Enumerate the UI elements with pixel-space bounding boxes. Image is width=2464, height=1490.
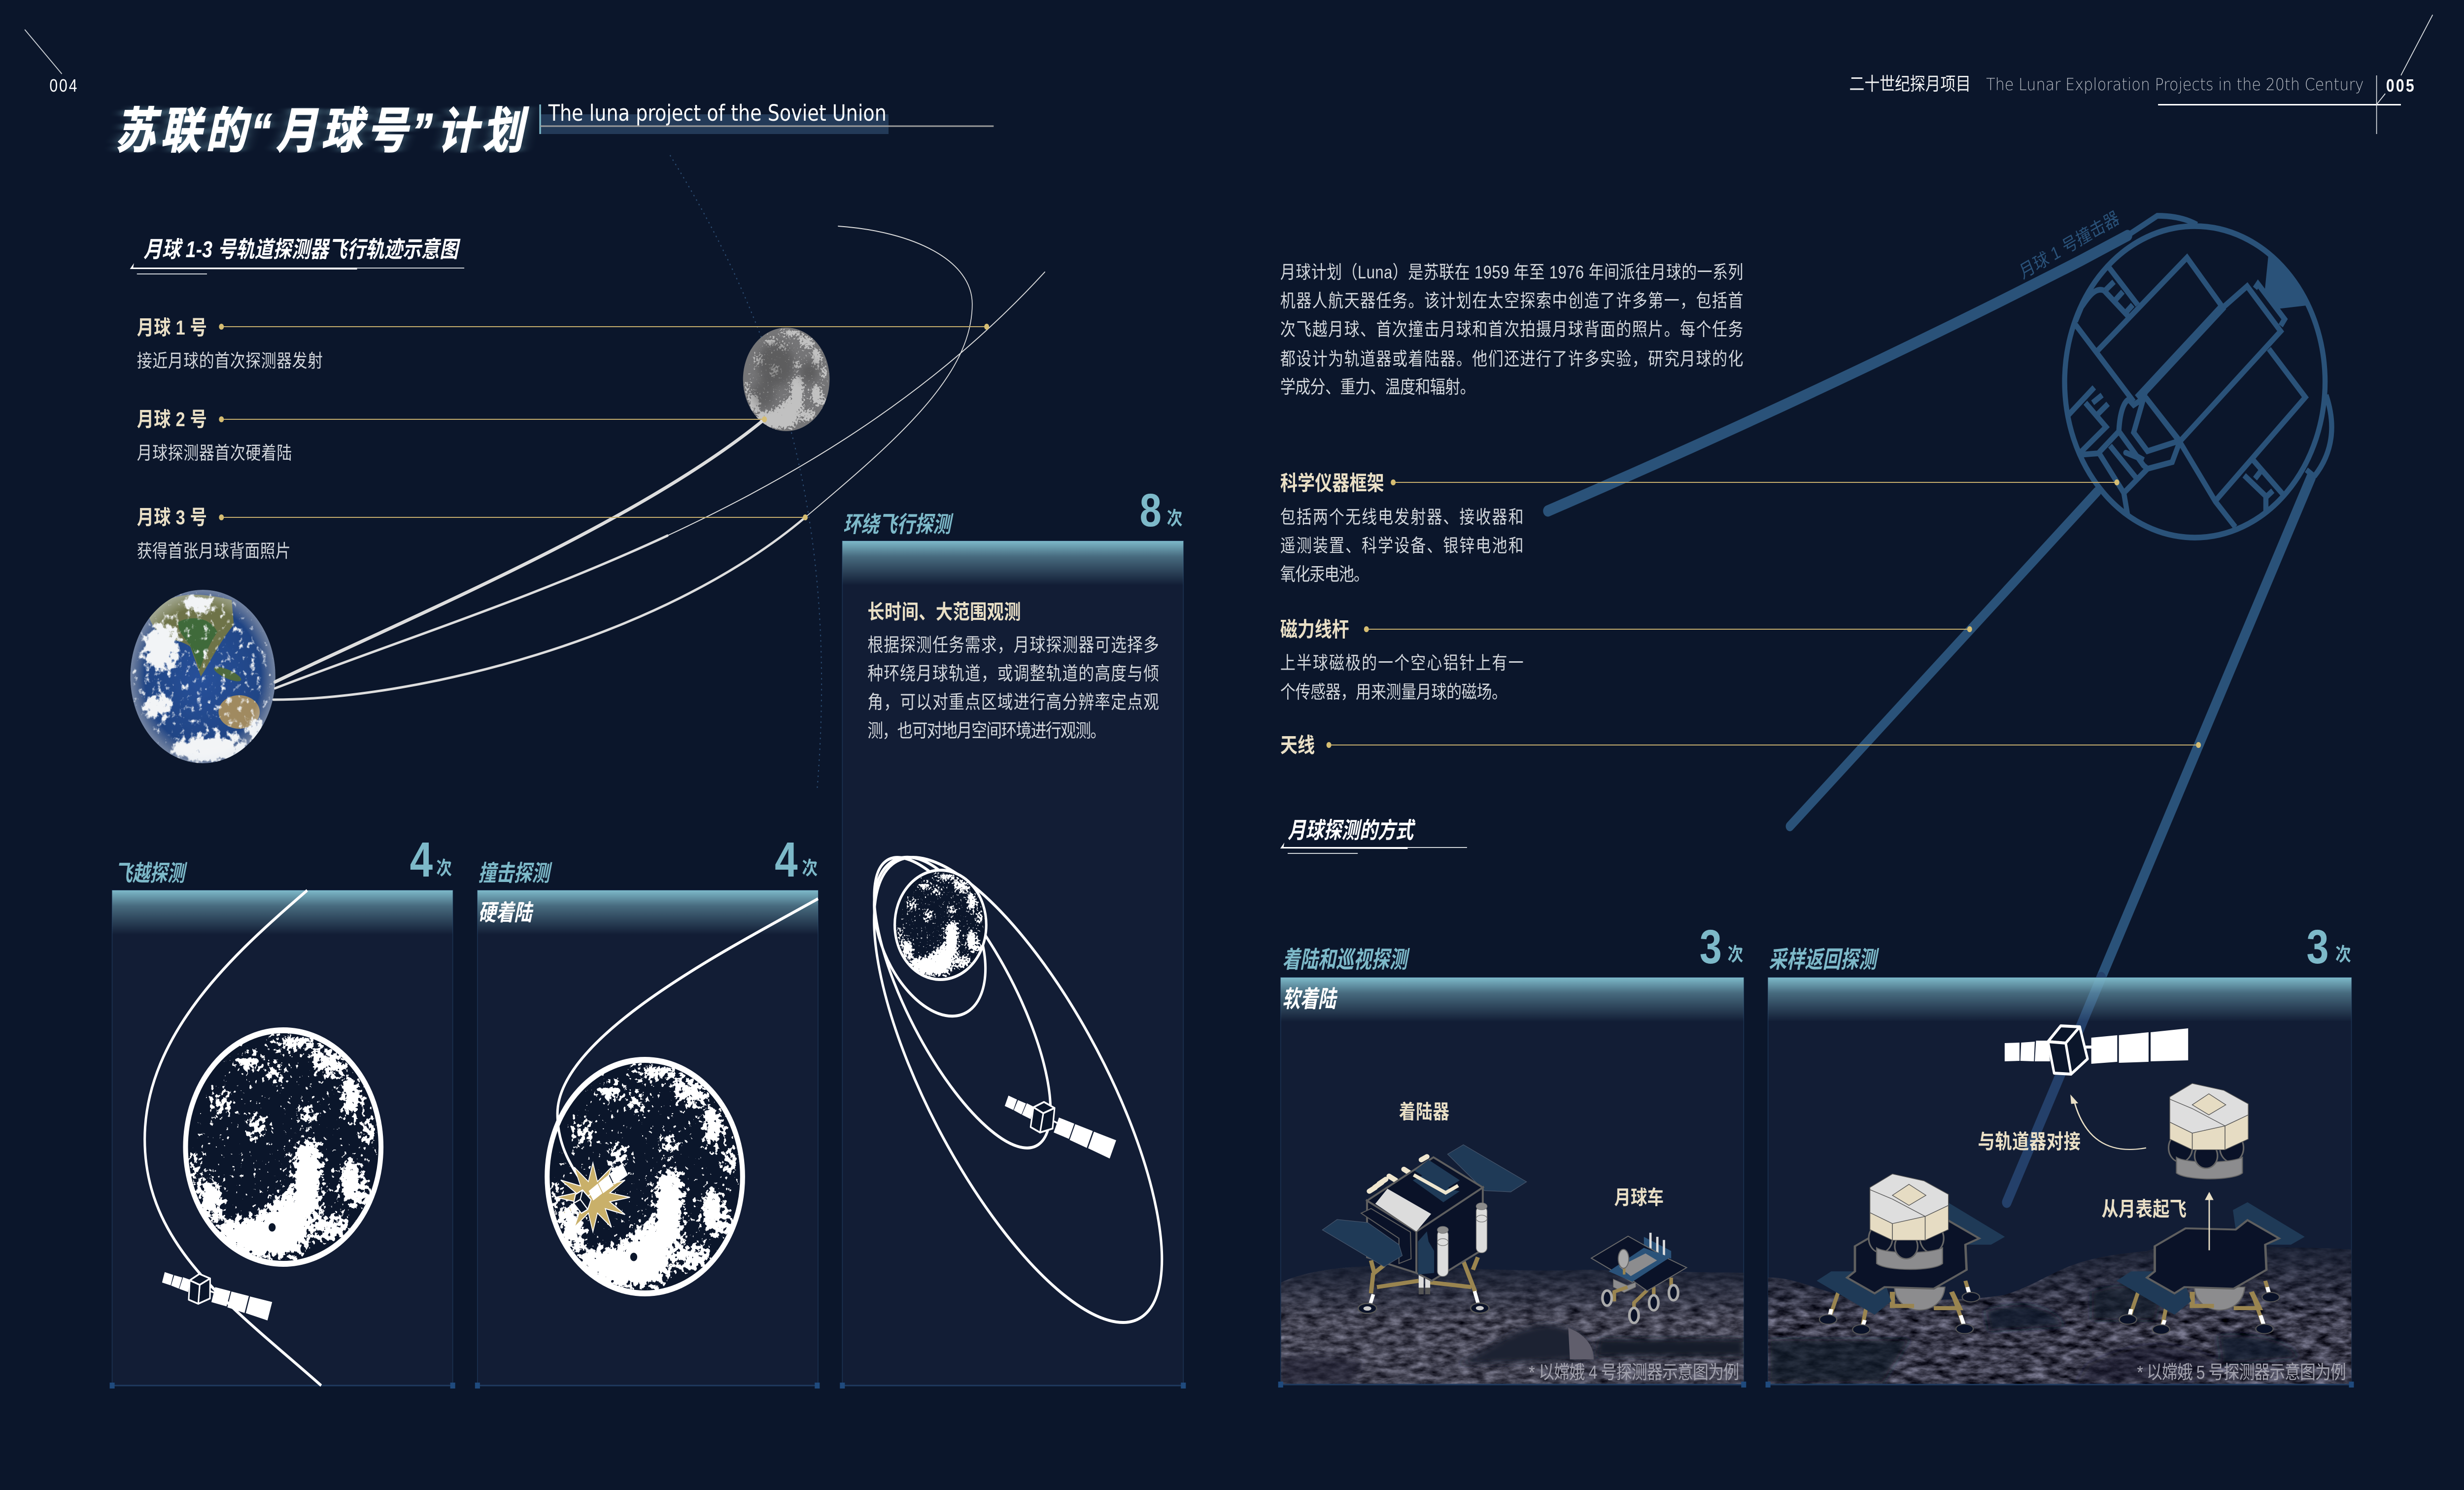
panel: landing and rover: 次 <box>1728 944 1743 965</box>
arrows: docking and liftoff <box>2070 1094 2214 1251</box>
running header right <box>1849 15 2432 134</box>
callout: antenna: 天线 <box>1280 734 1315 757</box>
panel: flyby <box>110 832 455 1388</box>
title: 苏联的“月球号”计划 <box>115 104 529 159</box>
panel: landing and rover: 着陆器 <box>1399 1101 1449 1123</box>
panel: landing and rover: * 以嫦娥 4 号探测器示意图为例 <box>1529 1362 1739 1383</box>
section heading: exploration methods <box>1280 818 1467 853</box>
moon photo <box>742 327 830 432</box>
panel: orbiting <box>840 494 1186 1388</box>
panel: flyby: 次 <box>436 858 452 879</box>
panel: impact <box>475 832 820 1388</box>
panel: impact: 4 <box>775 832 798 887</box>
title: 苏联的“月球号”计划 <box>115 104 529 159</box>
panel: orbiting: 角，可以对重点区域进行高分辨率定点观 <box>867 692 1159 713</box>
callout: magnetometer boom: 上半球磁极的一个空心铝针上有一 <box>1280 653 1524 674</box>
callout: luna 1: 月球 1 号 <box>137 317 207 339</box>
callout: instrument frame: 遥测装置、科学设备、银锌电池和 <box>1280 536 1524 556</box>
panel: sample return: 次 <box>2335 944 2351 965</box>
illustration: orbiter <box>2005 1026 2188 1074</box>
panel: orbiting: 次 <box>1167 508 1183 529</box>
illustration: rover <box>1591 1233 1687 1323</box>
panel: orbiting: 长时间、大范围观测 <box>867 601 1021 624</box>
callout: luna 3 <box>137 507 808 562</box>
panel: landing and rover: 3 <box>1700 920 1722 974</box>
faint dotted lunar orbit <box>670 155 821 788</box>
illustration: luna 1 sputnik-style probe <box>1548 216 2332 978</box>
panel: flyby: 飞越探测 <box>115 861 187 886</box>
earth <box>130 589 276 764</box>
panel: orbiting: 种环绕月球轨道，或调整轨道的高度与倾 <box>867 663 1159 684</box>
callout: luna 1 <box>137 317 989 372</box>
callout: magnetometer boom: 个传感器，用来测量月球的磁场。 <box>1280 682 1507 703</box>
callout: luna 2 <box>137 408 767 464</box>
intro text: 都设计为轨道器或着陆器。他们还进行了许多实验，研究月球的化 <box>1280 349 1743 370</box>
callout: magnetometer boom: 磁力线杆 <box>1280 618 1349 642</box>
callout: luna 2: 月球探测器首次硬着陆 <box>137 443 292 464</box>
callout: instrument frame <box>1280 472 2120 585</box>
callout: luna 3: 获得首张月球背面照片 <box>137 541 291 562</box>
subtitle English <box>539 100 993 134</box>
intro text: 机器人航天器任务。该计划在太空探索中创造了许多第一，包括首 <box>1280 291 1743 311</box>
callout: antenna <box>1280 734 2201 757</box>
panel: sample return: 3 <box>2306 920 2329 974</box>
section heading: exploration methods: 月球探测的方式 <box>1288 818 1416 843</box>
intro text: 月球计划（Luna）是苏联在 1959 年至 1976 年间派往月球的一系列 <box>1280 262 1743 283</box>
panel: impact: 撞击探测 <box>479 861 552 886</box>
panel: orbiting: 8 <box>1140 484 1162 537</box>
panel: sample return <box>1766 920 2354 1388</box>
panel: sample return: 与轨道器对接 <box>1978 1131 2081 1153</box>
intro text: 次飞越月球、首次撞击月球和首次拍摄月球背面的照片。每个任务 <box>1280 319 1743 340</box>
panel: landing and rover: 着陆和巡视探测 <box>1282 947 1410 973</box>
section heading: trajectories: 月球 1-3 号轨道探测器飞行轨迹示意图 <box>143 237 461 262</box>
panel: landing and rover: 月球车 <box>1614 1186 1664 1209</box>
intro text <box>1280 262 1743 398</box>
callout: instrument frame: 科学仪器框架 <box>1280 472 1384 495</box>
page number left with corner tick: 004 <box>49 76 77 96</box>
running header right: 二十世纪探月项目 <box>1849 74 1971 95</box>
panel: orbiting: 根据探测任务需求，月球探测器可选择多 <box>867 635 1159 656</box>
panel: landing and rover <box>1278 920 1746 1388</box>
page number left with corner tick <box>25 30 77 96</box>
running header right: The Lunar Exploration Projects in the 20th Century <box>1986 75 2364 95</box>
panel: sample return: 从月表起飞 <box>2102 1198 2187 1221</box>
panel: impact: 硬着陆 <box>479 900 534 925</box>
panel: orbiting: 环绕飞行探测 <box>843 512 954 537</box>
panel: flyby: 4 <box>410 832 433 887</box>
callout: magnetometer boom <box>1280 618 1972 703</box>
subtitle English: The luna project of the Soviet Union <box>548 100 887 126</box>
panel: sample return: * 以嫦娥 5 号探测器示意图为例 <box>2137 1362 2346 1383</box>
panel: landing and rover: 软着陆 <box>1282 986 1338 1013</box>
callout: luna 3: 月球 3 号 <box>137 507 207 529</box>
intro text: 学成分、重力、温度和辐射。 <box>1280 377 1475 398</box>
trajectories: luna 1, 2, 3 <box>274 226 1045 700</box>
label: luna 1 impactor: 月球 1 号撞击器 <box>2017 208 2122 283</box>
callout: luna 1: 接近月球的首次探测器发射 <box>137 351 323 372</box>
illustration: landers with ascent vehicles <box>1816 1084 2305 1334</box>
running header right: 005 <box>2386 76 2414 96</box>
callout: instrument frame: 包括两个无线电发射器、接收器和 <box>1280 507 1524 528</box>
panel: impact: 次 <box>802 858 818 879</box>
callout: luna 2: 月球 2 号 <box>137 408 207 431</box>
callout: instrument frame: 氧化汞电池。 <box>1280 564 1369 585</box>
panel: sample return: 采样返回探测 <box>1769 947 1879 973</box>
illustration: lander <box>1322 1145 1527 1314</box>
section heading: trajectories <box>130 237 464 274</box>
panel: orbiting: 测，也可对地月空间环境进行观测。 <box>867 720 1106 742</box>
